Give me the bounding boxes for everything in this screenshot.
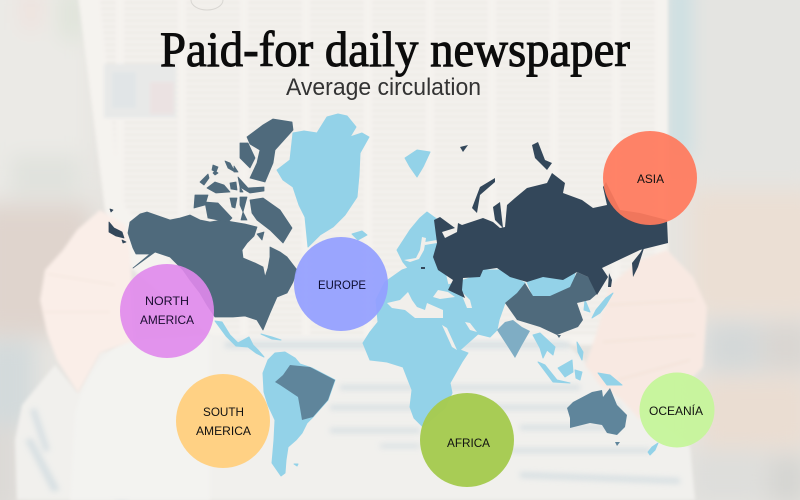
map: Australia [567,388,627,446]
map: Brazil [275,365,335,420]
hands [40,210,707,420]
Banks and Victoria islands [194,195,247,222]
callout: Asia: ASIA [637,172,664,186]
Sakhalin [632,245,645,277]
title: Paid-for daily newspaper [160,21,630,77]
callout: Oceania: OCEANÍA [649,403,703,418]
Borneo [558,360,573,377]
callout: North America: AMERICA [140,313,194,327]
Falklands [294,464,298,466]
callout: Europe [294,237,388,331]
Sumatra and Java [538,362,570,383]
shirt [15,335,695,500]
callout: South America: AMERICA [196,424,251,438]
callout: Africa [420,393,514,487]
callout: Oceania [640,372,714,448]
Severnaya Zemlya [532,142,552,170]
New Guinea [598,373,622,385]
South America [263,352,335,476]
Baffin island [250,198,292,243]
callout: South America: SOUTH [203,405,244,419]
Southampton island and coast [257,232,264,240]
Ellesmere island [247,119,293,182]
New Zealand [648,443,658,455]
newspaper [78,0,668,345]
Kaliningrad [421,267,425,269]
Greenland [277,114,369,247]
map: seas [387,237,477,350]
decorative newspaper ring [191,0,223,10]
Svalbard [405,150,430,177]
callout: North America: NORTH [145,294,189,308]
Axel Heiberg island [240,143,255,168]
Primorye [608,273,612,287]
Southeast Asia [533,333,555,358]
Cuba and Caribbean [261,334,281,340]
map: Russia [421,142,668,298]
world map [109,114,668,476]
Japan and Korea [584,293,613,318]
Mexico and Central America [215,321,264,357]
Iceland [352,231,367,240]
Gydan peninsula [493,202,503,228]
Arctic islands [200,161,264,193]
callout: Africa: AFRICA [447,436,490,450]
map: India [497,320,530,358]
Mongolia [527,273,575,296]
map: light-blue countries [215,114,658,476]
callout: South America [176,374,270,468]
callout: Europe: EUROPE [318,278,366,292]
Philippines and Sulawesi [575,342,583,380]
callout: Asia [603,131,697,225]
Europe, Africa and Central Asia [363,212,525,427]
Franz Josef Land [460,145,468,152]
callout: North America [120,264,214,358]
Far-east Russia tip [109,209,126,243]
map: Canada and USA [109,119,297,330]
Novaya Zemlya [472,178,495,213]
map: China [505,272,598,338]
subtitle: Average circulation [286,74,481,101]
